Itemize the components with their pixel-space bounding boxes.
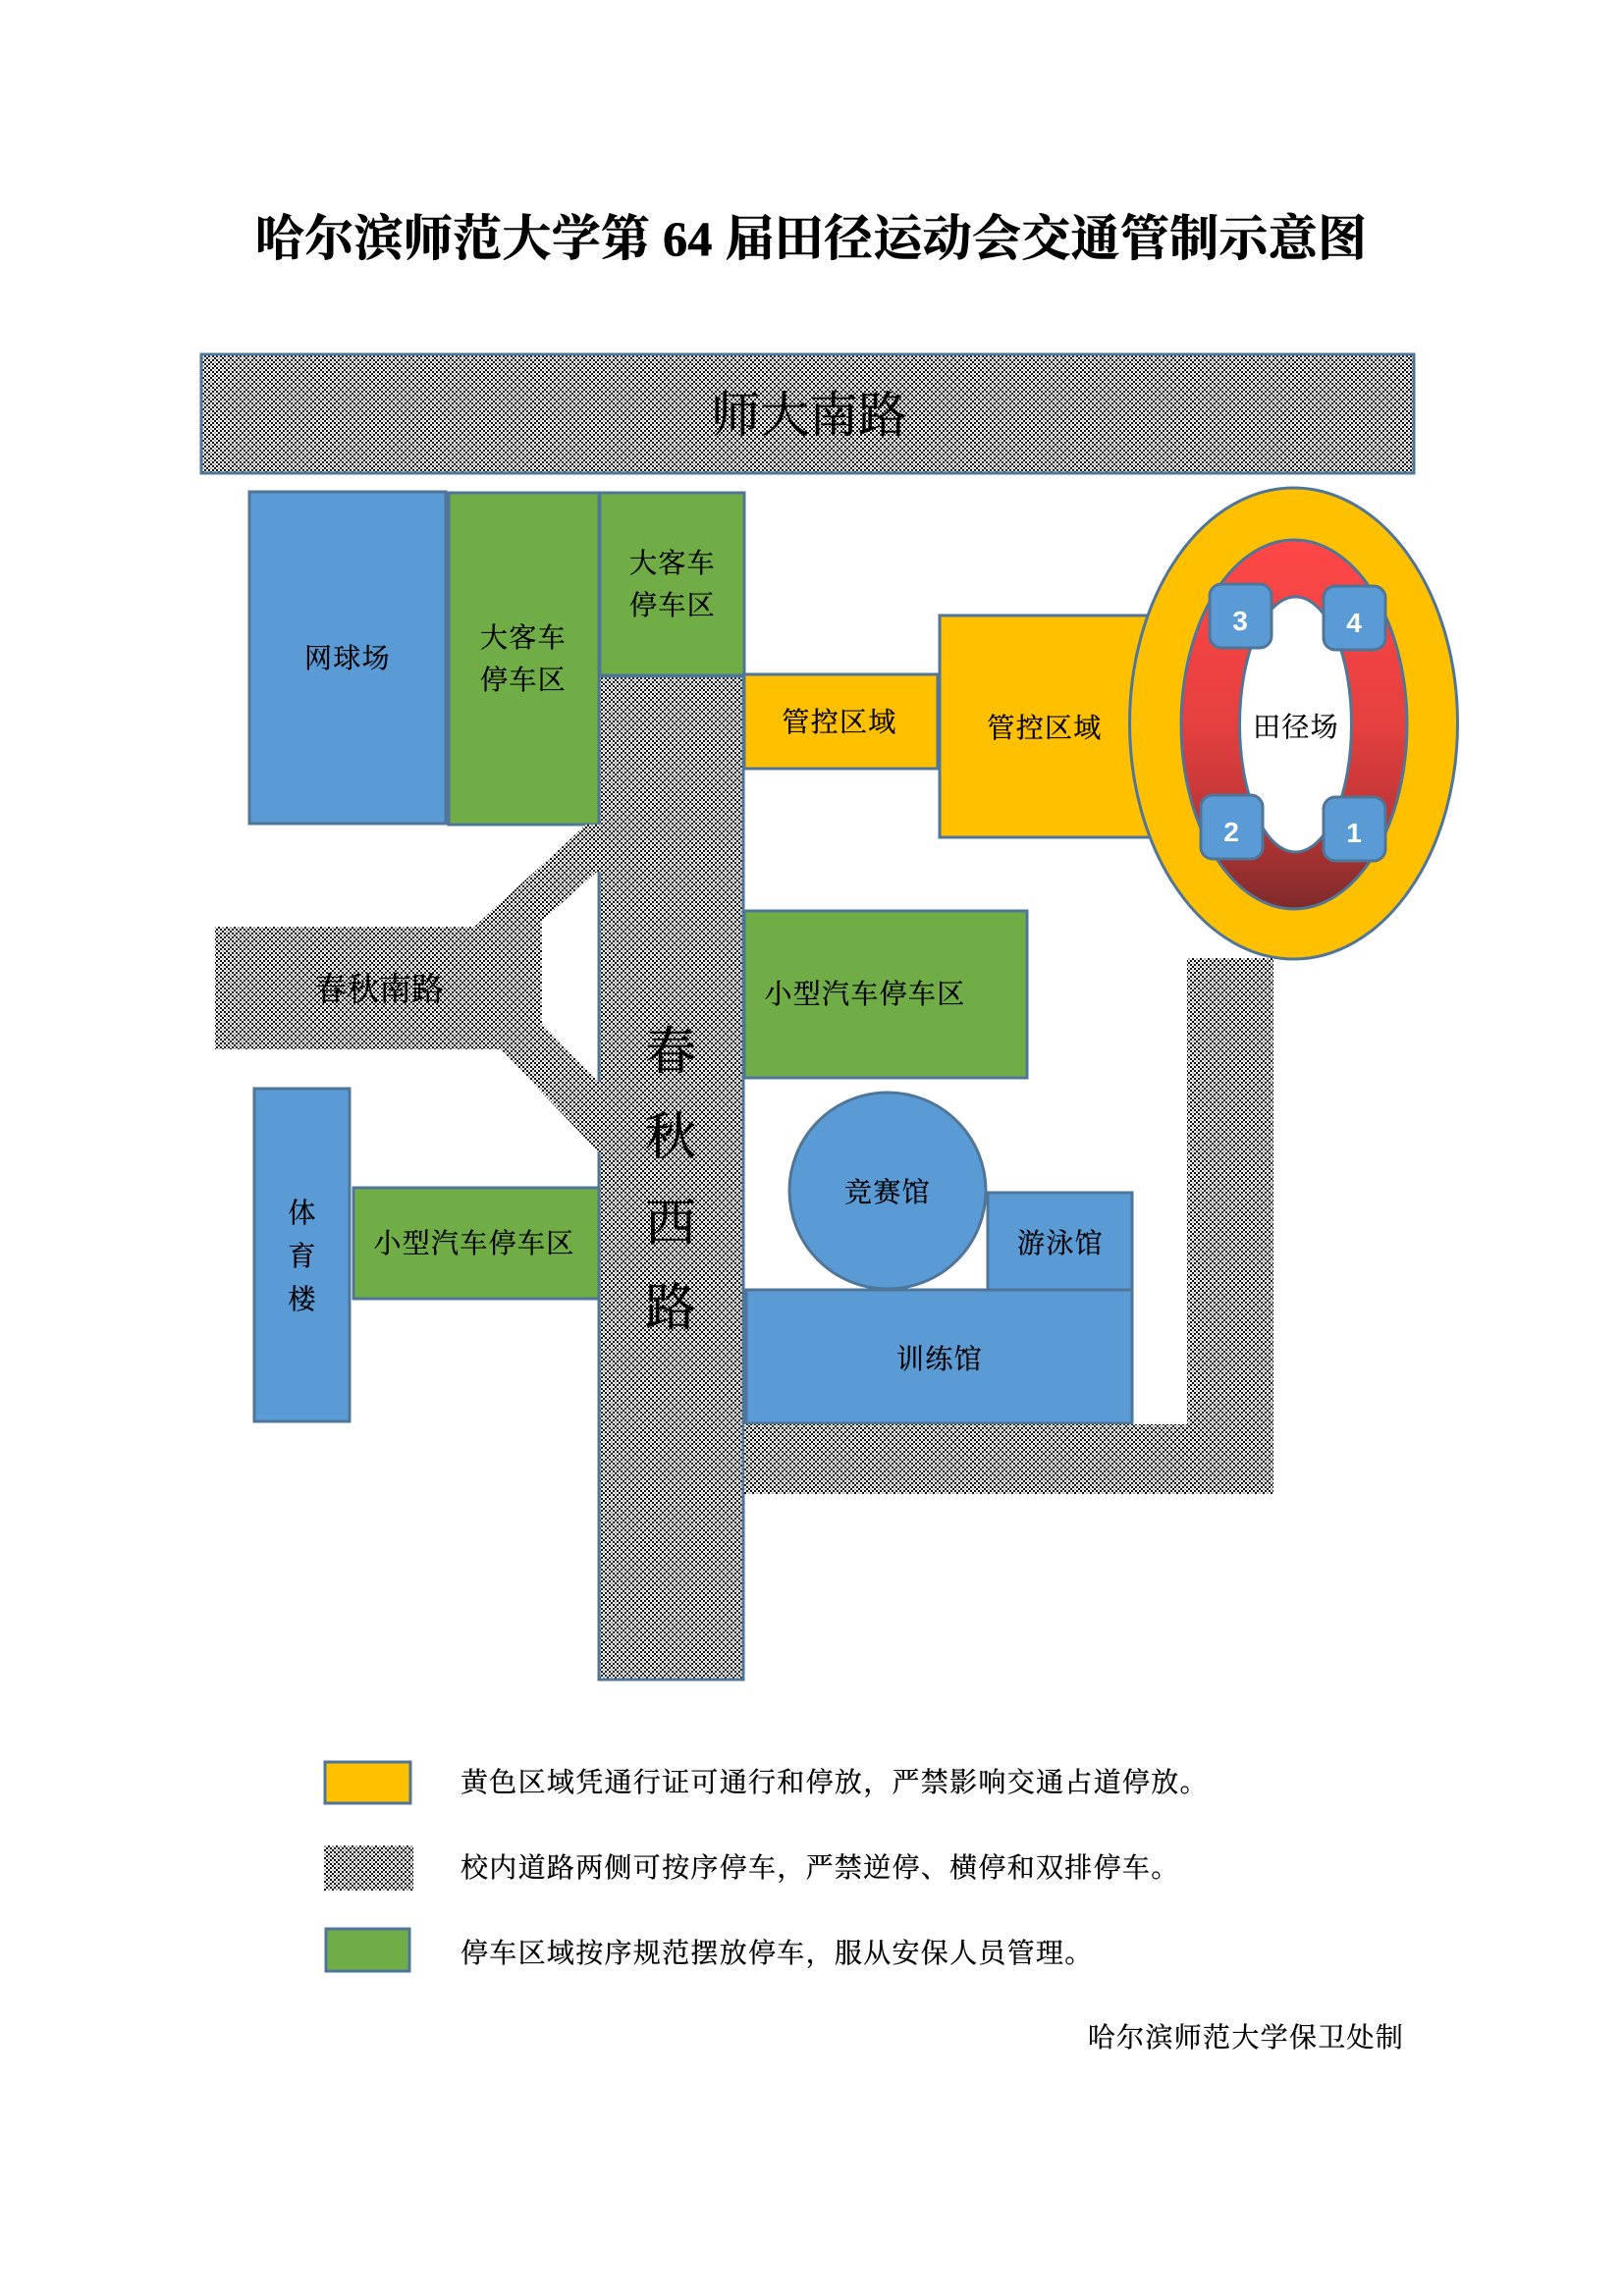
gate 2: 2	[1223, 817, 1239, 847]
road: 春秋西路: 春	[645, 1025, 696, 1081]
road: 师大南路: 师大南路	[711, 388, 907, 443]
road: 春秋西路: 秋	[645, 1110, 696, 1166]
building: 训练馆: 训练馆	[896, 1344, 983, 1375]
building: 竞赛馆	[789, 1093, 986, 1289]
title: 哈尔滨师范大学第 64 届田径运动会交通管制示意图	[255, 211, 1367, 266]
control area: 管控区域 large: 管控区域	[987, 713, 1103, 744]
legend: yellow text: 黄色区域凭通行证可通行和停放，严禁影响交通占道停放。	[460, 1767, 1209, 1798]
road: 春秋西路: 路	[645, 1281, 696, 1337]
red running track	[1181, 540, 1407, 909]
road: 春秋西路: 西	[645, 1197, 696, 1253]
building: 游泳馆: 游泳馆	[1017, 1228, 1104, 1259]
control area: 管控区域 small: 管控区域	[782, 707, 897, 738]
parking: 小型汽车停车区 right	[744, 911, 1027, 1078]
footer: issuing office: 哈尔滨师范大学保卫处制	[1088, 2022, 1404, 2054]
legend: yellow swatch	[325, 1762, 410, 1803]
gate 1	[1324, 797, 1385, 861]
legend: road swatch	[324, 1845, 413, 1891]
legend: road text: 校内道路两侧可按序停车，严禁逆停、横停和双排停车。	[460, 1852, 1180, 1884]
field label: 田径场	[1253, 712, 1339, 743]
control area: 管控区域 large	[940, 615, 1195, 837]
gate 4: 4	[1346, 608, 1362, 638]
gate 3	[1210, 584, 1272, 648]
parking: 小型汽车停车区 right: 小型汽车停车区	[764, 979, 966, 1010]
gate 1: 1	[1346, 818, 1362, 848]
building: 训练馆	[746, 1290, 1132, 1423]
control area: 管控区域 small	[744, 674, 938, 769]
gate 2	[1201, 795, 1263, 859]
parking: 小型汽车停车区 left: 小型汽车停车区	[373, 1228, 575, 1259]
legend	[324, 1762, 1209, 1971]
road: 春秋南路 with branches	[215, 825, 601, 1154]
parking: 大客车停车区 right	[600, 493, 744, 675]
building: 体育楼	[254, 1089, 350, 1421]
parking: 大客车停车区 left: 大客车	[480, 622, 567, 654]
building: 体育楼: 体	[288, 1198, 317, 1229]
building: 体育楼: 育	[288, 1241, 317, 1272]
parking: 大客车停车区 left: 停车区	[480, 665, 567, 696]
building: 网球场	[249, 492, 446, 824]
road: 师大南路	[201, 354, 1414, 473]
road: 春秋南路 with branches: 春秋南路	[314, 972, 444, 1008]
parking: 大客车停车区 right: 停车区	[629, 590, 716, 621]
building: 网球场: 网球场	[304, 643, 391, 674]
gate 4	[1324, 586, 1385, 650]
road: east campus road	[744, 958, 1273, 1494]
legend: green swatch	[326, 1929, 409, 1971]
inner field	[1239, 597, 1351, 852]
road: 春秋西路	[599, 676, 743, 1680]
parking: 小型汽车停车区 left	[353, 1188, 599, 1299]
parking: 大客车停车区 right: 大客车	[629, 548, 716, 579]
building: 体育楼: 楼	[288, 1284, 317, 1315]
building: 游泳馆	[988, 1193, 1132, 1291]
stadium: 田径场	[1129, 488, 1457, 959]
outer yellow ellipse	[1129, 488, 1457, 959]
building: 竞赛馆: 竞赛馆	[844, 1177, 931, 1208]
legend: green text: 停车区域按序规范摆放停车，服从安保人员管理。	[460, 1938, 1094, 1969]
gate 3: 3	[1232, 606, 1248, 636]
parking: 大客车停车区 left	[449, 493, 599, 825]
